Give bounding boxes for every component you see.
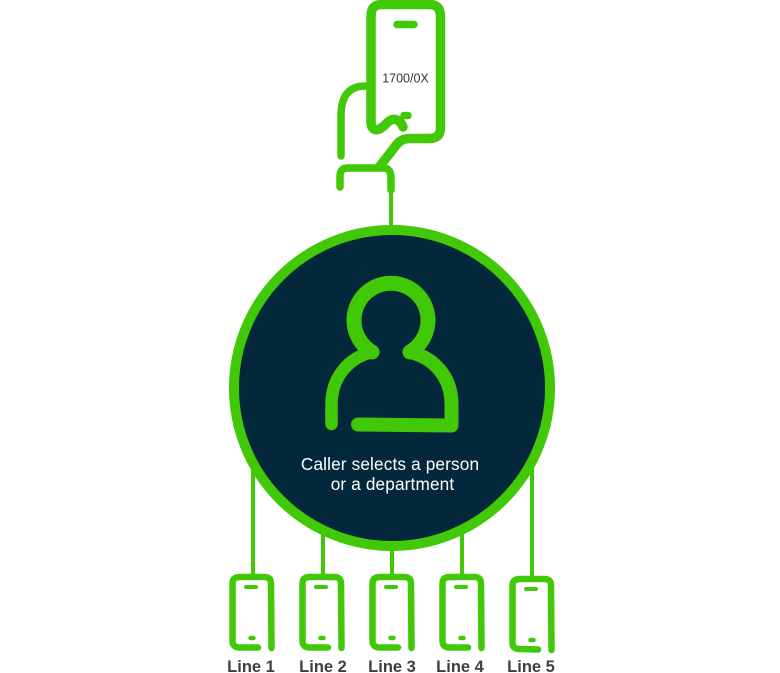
icon: hand holding phone <box>340 4 440 190</box>
phone body and thumb <box>371 4 440 166</box>
phone: line 4 <box>442 577 482 648</box>
phone: line 5 <box>512 579 552 650</box>
icon: person <box>332 283 452 426</box>
hand back <box>341 86 366 156</box>
caption: Caller selects a person <box>301 454 479 474</box>
finger <box>340 168 391 190</box>
phone speaker <box>397 21 414 28</box>
line labels <box>227 658 555 673</box>
phone: line 2 <box>302 577 342 648</box>
main circle <box>234 230 550 546</box>
person left shoulder <box>332 352 372 424</box>
phone button <box>404 112 408 119</box>
phone: line 1 <box>232 577 272 648</box>
caption: or a department <box>331 474 454 494</box>
person head <box>354 283 428 352</box>
person right shoulder and base <box>358 352 452 426</box>
phone number: 1700/0X <box>382 72 429 86</box>
phone: line 3 <box>372 577 412 648</box>
connector lines <box>253 188 532 578</box>
